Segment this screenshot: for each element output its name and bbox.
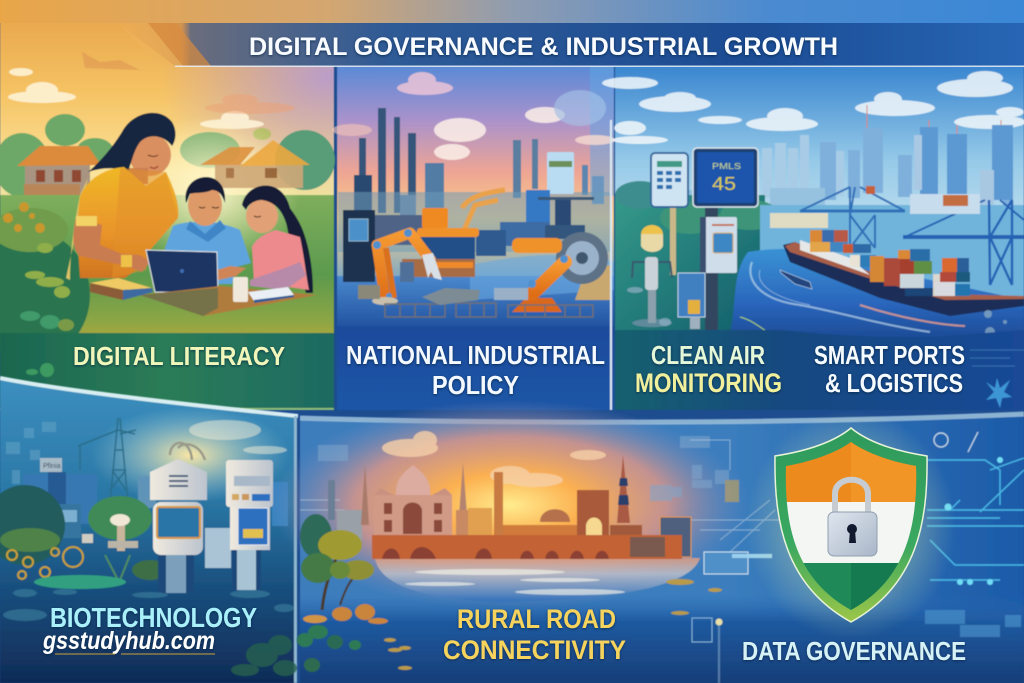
label band [0,333,334,408]
robot arm right [512,232,608,312]
city skyline [630,105,1013,215]
girl [242,185,313,293]
smokestacks [354,108,604,225]
back robot arm [462,190,505,235]
label band [337,326,614,410]
house: right [200,140,310,188]
small boat [780,270,812,289]
laptop [146,250,218,293]
fences and machine parts [385,303,593,317]
heading: national industrial policy: NATIONAL INDUSTRIAL [346,340,605,370]
circuit lines [920,458,1024,580]
container ship [783,230,1024,316]
boy [165,177,251,284]
heading: clean air monitoring: MONITORING [635,368,782,398]
heading: main title: DIGITAL GOVERNANCE & INDUSTRIAL GROWTH [249,33,838,61]
pylon [78,418,136,503]
air sensor figure [632,225,672,327]
ground stones [3,589,294,621]
bridge arches [372,535,682,559]
glow lamp [716,618,722,626]
river [728,249,1024,340]
clouds [382,431,606,487]
device: lab lamp [82,514,138,580]
icon: star spark [986,378,1012,408]
data panel left of shield [704,552,772,574]
skyline: monuments [328,455,691,557]
panel: biotechnology: Pfinia [43,463,61,470]
panel: national industrial policy [332,66,615,410]
central machine [400,208,479,282]
woman [66,113,178,280]
table mat and book [90,277,317,316]
panel: biotechnology [0,378,298,683]
padlock [828,480,877,556]
buildings [23,472,288,568]
air monitor: pole and large display: PMLS [712,162,741,171]
label band [615,330,1024,410]
foliage [0,485,168,580]
robot arm left [372,229,442,305]
foliage [0,202,90,360]
heading: biotechnology: BIOTECHNOLOGY [50,602,257,633]
capsule device one [150,443,207,593]
heading: smart ports and logistics: SMART PORTS [814,340,965,370]
crane: front [903,200,1024,285]
house: left [17,146,101,195]
pond [34,575,126,589]
water [375,558,700,602]
dark building [343,210,425,282]
lily pads and rocks [297,579,722,672]
tree [300,514,374,610]
air monitor: pole and large display [678,148,758,332]
circuit decor: left [318,436,739,502]
heading: clean air monitoring: CLEAN AIR [651,340,765,370]
heading: national industrial policy: POLICY [432,370,519,400]
heading: rural road connectivity [443,604,626,665]
air monitor: small panel [651,153,688,275]
crane: back [800,186,905,248]
heading: national industrial policy [346,340,605,400]
heading: digital literacy: DIGITAL LITERACY [73,341,285,371]
icon: security shield with padlock [753,422,950,634]
heading: clean air monitoring [635,340,782,398]
heading: smart ports and logistics: & LOGISTICS [825,368,963,398]
air monitor: pole and large display: 45 [712,174,736,194]
far trees [0,114,335,197]
tall screen building [526,152,574,224]
panel: digital literacy [0,0,335,410]
heading: smart ports and logistics [814,340,965,398]
top band [0,0,1024,23]
panel: clean air and smart ports [602,66,1024,410]
heading: rural road connectivity: CONNECTIVITY [443,635,626,665]
machines back [476,197,594,256]
heading: rural road connectivity: RURAL ROAD [457,604,616,634]
capsule device two [226,460,273,590]
heading: data governance: DATA GOVERNANCE [742,636,966,666]
land and trees [615,195,765,335]
title banner [118,23,1024,67]
lower fade [300,595,1024,683]
panel: rural road connectivity and data governance [270,400,1024,683]
watermark: gsstudyhub.com: gsstudyhub.com [42,627,215,655]
